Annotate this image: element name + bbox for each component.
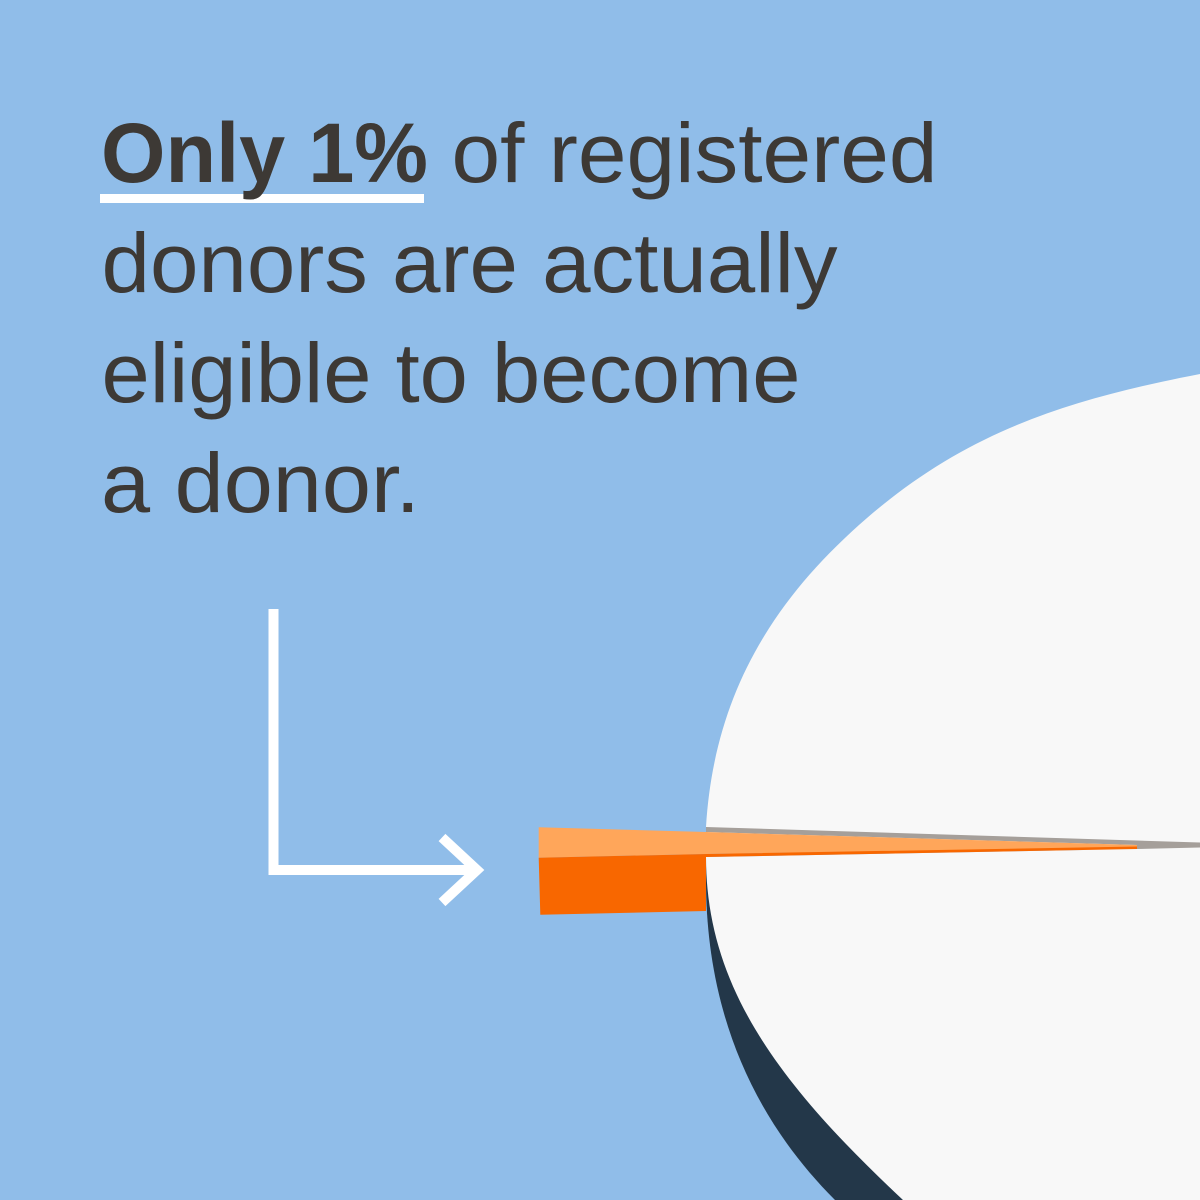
slice top face bbox=[539, 827, 1137, 858]
emphasised text: Only 1%: Only 1% bbox=[101, 106, 428, 200]
arrow pointing to the 1% slice bbox=[274, 609, 478, 902]
highlight underline bbox=[100, 194, 424, 203]
pie upper slice bbox=[706, 374, 1200, 850]
pulled-out 1% slice bbox=[539, 827, 1137, 915]
slice side face bbox=[539, 846, 1137, 915]
text: donors are actually: donors are actually bbox=[102, 216, 838, 310]
text: of registered: of registered bbox=[452, 106, 938, 200]
pie lower slice bbox=[706, 846, 1200, 1200]
text: a donor.: a donor. bbox=[101, 436, 420, 530]
grey slice bbox=[706, 827, 1200, 849]
pie chart bbox=[539, 374, 1200, 1200]
headline bbox=[100, 106, 938, 530]
pie shadow edge bbox=[706, 857, 903, 1200]
text: eligible to become: eligible to become bbox=[102, 326, 801, 420]
